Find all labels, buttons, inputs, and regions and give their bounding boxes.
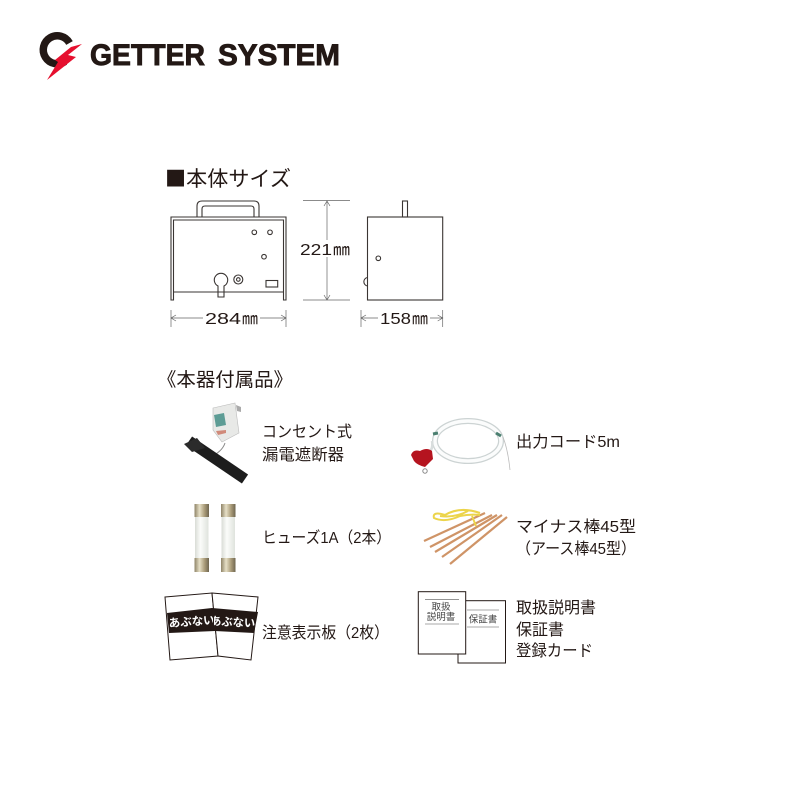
label: 保証書 [516,621,564,639]
dimension: width 284mm: 284 [205,311,241,328]
icon: manual [418,592,466,654]
label: 出力コード5m [516,433,620,451]
icon: two warning signs: あぶない [168,614,215,630]
item: output cord [411,421,620,473]
icon: two warning signs: あぶない [210,615,255,630]
label: コンセント式 [262,423,352,441]
logo: Getter System [43,36,340,80]
logo wordmark [90,39,340,72]
side body [368,217,443,300]
logo wordmark: GETTER [90,39,205,72]
icon: two glass fuses [194,504,236,572]
dimension: width 284mm [171,305,286,329]
dimension: height 221mm: ㎜ [333,236,350,260]
handle [197,201,259,217]
dimension: width 284mm: ㎜ [242,305,258,329]
icon: two warning signs [165,593,258,660]
hole [376,256,381,261]
label: ヒューズ1A（2本） [262,529,391,547]
label: 取扱説明書 [516,599,596,617]
item: earth leakage breaker [184,403,352,479]
diagram: front view [171,201,286,300]
icon: coiled cord with red clip [411,421,510,473]
bump [364,278,368,286]
icon: manual: 取扱 [431,601,451,613]
label: マイナス棒45型 [516,518,636,536]
label [516,518,636,558]
icon: manual: 説明書 [427,611,455,623]
label [516,599,596,660]
body frame [171,217,286,300]
heading: body size: ■本体サイズ [165,163,291,193]
dimension: depth 158mm [361,305,443,329]
diagram: side view [364,201,443,300]
item: documents [418,592,596,663]
controls [214,230,278,297]
label: 登録カード [516,642,593,660]
label: 漏電遮断器 [262,446,344,464]
logo wordmark: SYSTEM [218,39,340,72]
icon: C ring with lightning bolt [43,36,82,80]
dimension: height 221mm [299,200,351,300]
item: warning signs [165,593,389,660]
item: minus rods [424,510,636,564]
dimension: depth 158mm: ㎜ [412,305,428,329]
heading: accessories: 《本器付属品》 [157,365,293,392]
dimension: height 221mm: 221 [300,242,332,259]
label [262,423,352,464]
icon: breaker with cable [184,403,245,479]
label: 注意表示板（2枚） [262,624,389,642]
icon: warranty sheet: 保証書 [469,614,497,626]
label: （アース棒45型） [516,540,636,558]
dimension: depth 158mm: 158 [380,311,411,328]
rod [402,201,408,217]
icon: copper rods with yellow wire [424,510,507,564]
item: fuses [194,504,391,572]
icon: warranty sheet [458,601,506,663]
